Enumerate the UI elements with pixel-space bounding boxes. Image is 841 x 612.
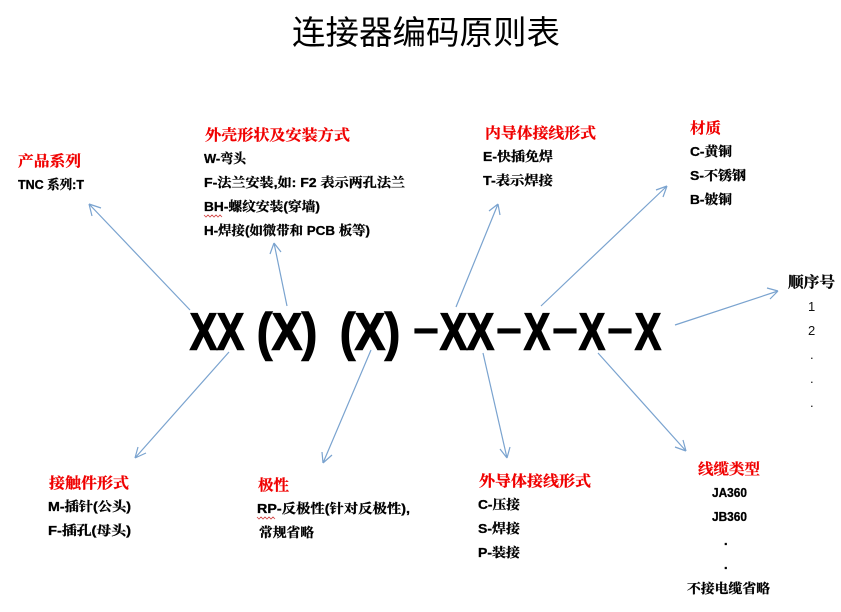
panel: contact type (48, 474, 131, 538)
code pattern: (X) (340, 304, 400, 362)
code pattern: X (579, 304, 605, 362)
panel: outer conductor termination: C-压接 (478, 497, 521, 512)
panel: cable type: . (724, 533, 728, 548)
panel: outer conductor termination: 外导体接线形式 (479, 472, 591, 490)
panel: outer conductor termination: P-装接 (478, 545, 521, 560)
arrow: product series (89, 204, 190, 310)
panel: cable type: JA360 (712, 485, 747, 500)
code pattern (190, 299, 661, 362)
panel: sequence number (788, 273, 835, 410)
panel: shell shape and mounting: BH-螺纹安装(穿墙) (204, 199, 320, 214)
panel: contact type: F-插孔(母头) (48, 523, 131, 538)
arrow: inner conductor (456, 204, 500, 307)
panel: product series: TNC 系列:T (18, 177, 84, 192)
panel: sequence number: 顺序号 (788, 273, 835, 291)
arrow: contact type (135, 352, 229, 458)
panel: material (690, 119, 746, 207)
arrow: polarity (322, 350, 371, 463)
code pattern: – (607, 299, 633, 357)
panel: shell shape and mounting: F-法兰安装,如: F2 表示两孔法兰 (204, 175, 405, 190)
panel: cable type: 不接电缆省略 (687, 581, 770, 596)
arrow: shell shape (270, 243, 287, 306)
panel: material: S-不锈钢 (690, 168, 746, 183)
panel: product series: 产品系列 (18, 152, 81, 170)
panel: contact type: M-插针(公头) (48, 499, 131, 514)
panel: sequence number: . (810, 347, 814, 362)
panel: polarity: RP-反极性(针对反极性), (257, 501, 410, 516)
code pattern: – (552, 299, 578, 357)
panel: inner conductor termination (483, 124, 596, 188)
panel: material: C-黄铜 (690, 144, 732, 159)
panel: polarity: 常规省略 (259, 525, 314, 540)
panel: shell shape and mounting: W-弯头 (204, 151, 247, 166)
code pattern: (X) (257, 304, 317, 362)
code pattern: XX (190, 304, 244, 362)
panel: cable type: JB360 (712, 509, 747, 524)
panel: shell shape and mounting (204, 126, 405, 238)
panel: polarity: 极性 (258, 476, 289, 494)
panel: material: 材质 (690, 119, 721, 137)
panel: inner conductor termination: E-快插免焊 (483, 149, 553, 164)
panel: cable type: 线缆类型 (698, 460, 760, 478)
code pattern: X (524, 304, 550, 362)
panel: sequence number: . (810, 371, 814, 386)
code pattern: X (635, 304, 661, 362)
panel: sequence number: . (810, 395, 814, 410)
panel: sequence number: 1 (808, 299, 815, 314)
code pattern: XX (440, 304, 494, 362)
panel: cable type (687, 460, 770, 596)
panel: shell shape and mounting: 外壳形状及安装方式 (205, 126, 350, 144)
panel: material: B-铍铜 (690, 192, 732, 207)
code pattern: – (413, 299, 439, 357)
panel: contact type: 接触件形式 (49, 474, 129, 492)
arrow: sequence number (675, 288, 778, 325)
panel: sequence number: 2 (808, 323, 815, 338)
panel: outer conductor termination: S-焊接 (478, 521, 521, 536)
arrow: cable type (598, 353, 686, 451)
panel: inner conductor termination: T-表示焊接 (483, 173, 554, 188)
panel: product series (18, 152, 84, 192)
panel: cable type: . (724, 557, 728, 572)
panel: shell shape and mounting: H-焊接(如微带和 PCB 板等) (204, 223, 370, 238)
panel: polarity (257, 476, 410, 540)
arrow: material (541, 186, 667, 306)
panel: inner conductor termination: 内导体接线形式 (485, 124, 596, 142)
panel: outer conductor termination (478, 472, 591, 560)
title: 连接器编码原则表 (292, 14, 560, 51)
arrow: outer conductor (483, 353, 510, 458)
code pattern: – (496, 299, 522, 357)
